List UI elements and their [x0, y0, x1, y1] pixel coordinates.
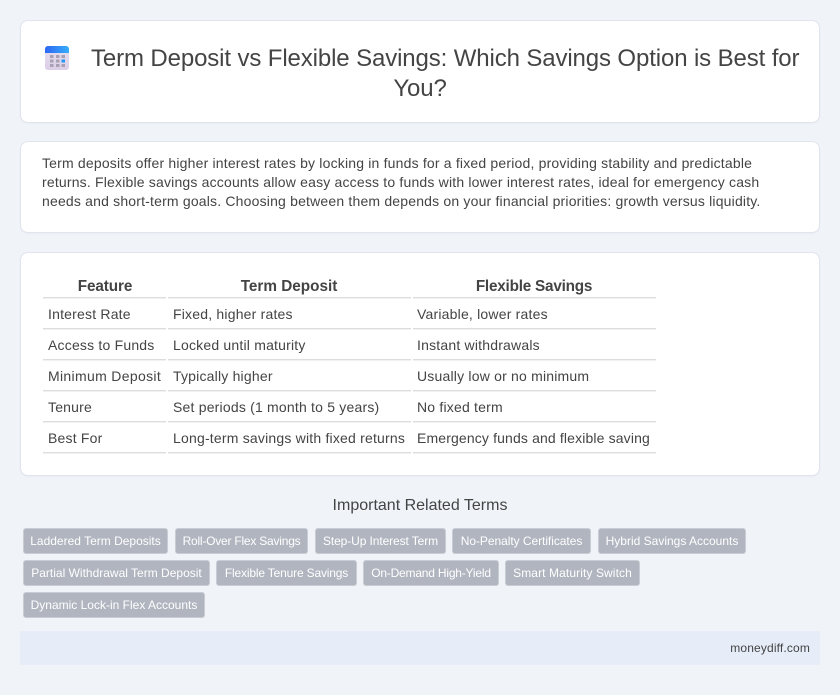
tag: No-Penalty Certificates [461, 534, 582, 548]
icon: calendar [45, 46, 69, 70]
tag [216, 560, 357, 586]
row: interest rate: Interest Rate [48, 306, 131, 322]
row: interest rate: Variable, lower rates [417, 306, 548, 322]
intro paragraph [42, 155, 761, 209]
row: access to funds: Locked until maturity [173, 337, 306, 353]
tag [452, 528, 591, 554]
table header: Flexible Savings [476, 278, 592, 295]
row: access to funds: Access to Funds [48, 337, 154, 353]
intro paragraph: Term deposits offer higher interest rates by locking in funds for a fixed period, providing stability and predictable [42, 155, 752, 171]
tag [23, 560, 210, 586]
row: best for: Best For [48, 430, 103, 446]
row: minimum deposit: Typically higher [173, 368, 273, 384]
tag: On-Demand High-Yield [371, 566, 491, 580]
tag [315, 528, 446, 554]
intro paragraph: returns. Flexible savings accounts allow easy access to funds with lower interest rates, ideal for emergency cash [42, 174, 759, 190]
row: best for [43, 430, 656, 454]
tag: Laddered Term Deposits [30, 534, 161, 548]
tag: Dynamic Lock-in Flex Accounts [31, 598, 197, 612]
panel: header [20, 20, 820, 123]
row: minimum deposit: Usually low or no minimum [417, 368, 589, 384]
tag: Smart Maturity Switch [513, 566, 632, 580]
title: You? [393, 75, 447, 102]
tag [23, 592, 205, 618]
row: best for: Emergency funds and flexible saving [417, 430, 650, 446]
tag: Hybrid Savings Accounts [606, 534, 738, 548]
row: tenure: Tenure [48, 399, 92, 415]
panel: comparison table [20, 252, 820, 476]
panel: intro text [20, 141, 820, 233]
tag [175, 528, 308, 554]
row: interest rate [43, 306, 656, 330]
table header [43, 278, 656, 299]
table header: Feature [78, 278, 132, 295]
related term tags [23, 528, 746, 618]
row: minimum deposit [43, 368, 656, 392]
tag [505, 560, 640, 586]
row: tenure: Set periods (1 month to 5 years) [173, 399, 379, 415]
row: interest rate: Fixed, higher rates [173, 306, 293, 322]
row: tenure [43, 399, 656, 423]
title [91, 45, 800, 102]
title: Term Deposit vs Flexible Savings: Which Savings Option is Best for [91, 45, 799, 72]
intro paragraph: needs and short-term goals. Choosing between them depends on your financial priorities: growth versus liquidity. [42, 193, 761, 209]
heading: related terms: Important Related Terms [333, 497, 507, 514]
row: access to funds [43, 337, 656, 361]
tag: Flexible Tenure Savings [225, 566, 348, 580]
footer source: moneydiff.com [730, 641, 810, 655]
tag [23, 528, 168, 554]
table header: Term Deposit [241, 278, 337, 295]
row: minimum deposit: Minimum Deposit [48, 368, 161, 384]
tag: Step-Up Interest Term [323, 534, 438, 548]
tag [363, 560, 499, 586]
tag: Partial Withdrawal Term Deposit [31, 566, 202, 580]
row: tenure: No fixed term [417, 399, 503, 415]
row: access to funds: Instant withdrawals [417, 337, 540, 353]
footer bar [20, 631, 820, 665]
tag [598, 528, 746, 554]
row: best for: Long-term savings with fixed returns [173, 430, 405, 446]
tag: Roll-Over Flex Savings [183, 534, 300, 548]
